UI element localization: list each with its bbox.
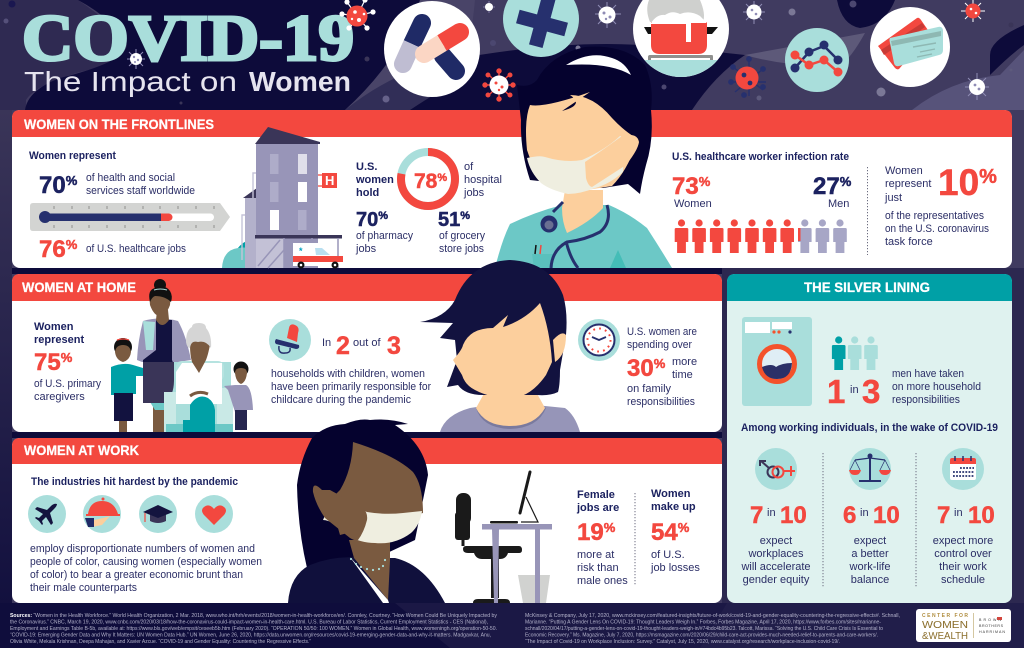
stat: men infection rate: 27 — [813, 173, 840, 200]
stat: 30 percent: on family — [627, 383, 672, 395]
stat: 2 out of 3: 2 — [336, 332, 350, 360]
stat: 54 percent: % — [678, 520, 690, 535]
logo: center for women and wealth: &WEALTH — [922, 630, 968, 642]
stat: 19 percent: jobs are — [576, 502, 619, 514]
stat: 2 out of 3 — [322, 332, 401, 360]
stat: 19 percent — [576, 489, 628, 587]
stat: grocery jobs — [438, 209, 485, 255]
text block: disproportionate: of color) to bear a greater economic brunt than — [30, 569, 243, 581]
sources: right column: “The Impact of Covid-19 on Workplace Inclusion: Survey.” Catalyst, July 15, 2020, www.catalyst.org/research/workplace-inclusion-covid-19/. — [525, 639, 840, 645]
stat: 30 percent: more — [672, 356, 697, 368]
icon: virus white right top — [743, 1, 765, 24]
logo: center for women and wealth — [916, 609, 1011, 642]
icon: graduation cap — [139, 495, 177, 533]
stat: 54 percent: make up — [651, 501, 696, 513]
icon: line chart circle — [785, 28, 849, 92]
text block: caregivers: Women — [34, 321, 74, 333]
icon: heart — [195, 495, 233, 533]
stat: gender equity: in — [767, 507, 776, 519]
text block: U.S. women hold: hold — [356, 187, 379, 199]
stat: 19 percent: % — [604, 520, 616, 535]
text block: women represent: Women represent — [29, 150, 116, 162]
text block: U.S. women hold: women — [355, 174, 394, 186]
icon: virus red centre — [483, 69, 515, 101]
sources: left column: Employment and Earnings Table B-5b, available at: https://www.bls.gov/web/empsit/ceseeb5b.htm (February 2020). “OPERATION 50/50: 100 WOMEN.” Women in Global Health, www.womeningh.org/operation-50-50. — [10, 626, 497, 632]
stat: 30 percent: time — [672, 369, 693, 381]
stat: 30 percent: % — [654, 356, 666, 371]
stat: gender equity: 10 — [780, 502, 807, 529]
stat: pharmacy jobs: % — [378, 210, 388, 222]
stat: 54 percent — [650, 488, 700, 574]
stat: grocery jobs: store jobs — [439, 243, 484, 255]
text block: households: households with children, women — [271, 368, 425, 380]
stat: 19 percent: male ones — [577, 575, 628, 587]
text block: disproportionate: employ disproportionate numbers of women and — [30, 543, 255, 555]
logo: center for women and wealth: WOMEN — [922, 619, 968, 631]
subheading: Among working individuals, in the wake of COVID-19 — [741, 422, 998, 434]
stat: 30 percent: U.S. women are — [627, 326, 697, 338]
text block: women represent: services staff worldwide — [86, 185, 195, 197]
stat: work-life balance: work-life — [849, 561, 890, 573]
stat: 1 in 3: responsibilities — [892, 394, 960, 406]
stat: 1 in 3: in — [850, 384, 859, 396]
stat: men infection rate: % — [840, 174, 852, 189]
heading: WOMEN AT HOME — [22, 279, 136, 295]
stat: 76 percent: % — [66, 237, 78, 252]
stat: work schedule: control over — [934, 548, 992, 560]
thermometer chart — [30, 203, 230, 231]
text block: infection rate heading: U.S. healthcare worker infection rate — [672, 151, 849, 163]
stat: work-life balance: 6 — [843, 502, 856, 529]
stat: 19 percent: risk than — [577, 562, 619, 574]
stat: work schedule: expect more — [933, 535, 993, 547]
sources: left column: Sources: “Women in the Health Workforce.” World Health Organization, 2 Mar. 2018, www.who.int/hrh/events/2018/women-in-health-workforce/en/. Connley, Courtney. “How Women Could Be Uniquely Impacted by — [10, 613, 497, 619]
stat: task force: % — [979, 166, 997, 188]
stat: 19 percent: more at — [577, 549, 614, 561]
logo: center for women and wealth: CENTER FOR — [922, 613, 968, 619]
icon: washing machine — [742, 317, 812, 406]
stat: 2 out of 3: 3 — [387, 332, 401, 360]
icon: virus red top right — [961, 0, 985, 22]
panel: women on the frontlines — [12, 110, 1012, 268]
text block: households: childcare during the pandemic — [271, 394, 411, 406]
icon: virus white small top — [483, 1, 495, 13]
stat: work schedule: their work — [939, 561, 987, 573]
stat: women infection rate: % — [699, 174, 711, 189]
stat: 2 out of 3: out of — [353, 337, 381, 349]
panel: women at work — [12, 438, 722, 603]
stat: women infection rate: Women — [674, 198, 712, 210]
stat: work schedule: in — [954, 507, 963, 519]
stat: task force: task force — [885, 236, 933, 248]
text block: U.S. women hold: U.S. — [356, 161, 377, 173]
illustration: hospital: H — [325, 173, 334, 188]
stat: 1 in 3: 1 — [827, 373, 845, 410]
stat: pharmacy jobs: 70 — [356, 209, 378, 231]
text block: of hospital jobs: jobs — [463, 187, 485, 199]
donut chart: 78 percent: % — [437, 172, 447, 184]
stat: work schedule — [933, 502, 995, 586]
stat: 1 in 3 — [827, 368, 981, 410]
stat: 76 percent — [39, 236, 186, 263]
text block: women represent — [29, 150, 195, 199]
stat: task force — [884, 162, 997, 248]
stat: 2 out of 3: In — [322, 337, 331, 349]
stat: 76 percent: of U.S. healthcare jobs — [86, 243, 186, 255]
icon: gender symbols — [755, 448, 797, 490]
pictogram: ten people — [675, 219, 847, 253]
text block: of hospital jobs — [463, 161, 502, 199]
panel: the silver lining — [727, 274, 1012, 603]
stat: 30 percent: responsibilities — [627, 396, 695, 408]
stat: task force: Women — [885, 165, 923, 177]
title: COVID-19 — [22, 2, 354, 75]
sources: right column: schnall/2020/04/17/putting-a-gender-lens-on-covid-19-thought-leaders-weigh-in/#74bdc4b95b23. Talcott, Marissa. “Solving the U.S. Child Care Crisis Is Essential to — [525, 626, 883, 632]
stat: grocery jobs: of grocery — [439, 230, 485, 242]
sources: left column: the Coronavirus.” CNBC, March 19, 2020, www.cnbc.com/2020/03/18/how-the-coronavirus-could-impact-women-in-health-care.html. U.S. Bureau of Labor Statistics, Current Employment Statistics - CES (National), — [10, 620, 488, 626]
sources: right column — [525, 613, 900, 645]
icon: credit cards circle — [870, 7, 950, 87]
text block: households — [271, 368, 431, 406]
illustration: woman at home — [420, 260, 580, 432]
stat: work-life balance: expect — [854, 535, 886, 547]
donut chart: 78 percent — [401, 152, 455, 206]
subtitle: Women — [249, 66, 351, 97]
icon: airplane — [28, 495, 66, 533]
stat: gender equity: gender equity — [743, 574, 810, 586]
text block: disproportionate: people of color, causing women (especially women — [30, 556, 262, 568]
text block: caregivers: % — [61, 350, 73, 365]
text block: of hospital jobs: hospital — [464, 174, 502, 186]
text block: households: have been primarily responsible for — [271, 381, 431, 393]
sources: right column: McKinsey & Company, July 17, 2020, www.mckinsey.com/featured-insights/future-of-work/covid-19-and-gender-equality-countering-the-regressive-effects#. Schnall, — [525, 613, 900, 619]
text block: disproportionate — [30, 543, 262, 594]
stat: gender equity — [740, 502, 811, 586]
icon: pills circle — [384, 1, 480, 97]
text block: women represent: 70 — [39, 172, 66, 199]
icon: calendar — [942, 448, 984, 490]
icon: boiling pot circle — [633, 0, 729, 77]
stat: task force: of the representatives — [885, 210, 984, 222]
stat: 54 percent: of U.S. — [651, 549, 685, 561]
stat: work schedule: 10 — [968, 502, 995, 529]
sources: left column: Olivia White, Mekala Krishnan, Deepa Mahajan, and Xavier Azcue. “COVID-19 and Gender Equality: Countering the Regressive Effects.” — [10, 639, 311, 645]
sources: left column: “COVID-19: Emerging Gender Data and Why It Matters: UN Women Data Hub.” UN Women, June 26, 2020, https://data.unwomen.org/resources/covid-19-emerging-gender-data-and-why-it-matters. Madgavkar, Anu, — [10, 632, 491, 638]
stat: men infection rate — [813, 173, 852, 210]
stat: gender equity: will accelerate — [740, 561, 811, 573]
subtitle — [24, 66, 351, 97]
stat: task force: 10 — [938, 162, 979, 203]
subtitle: The Impact on — [24, 66, 237, 97]
text block: caregivers: 75 — [34, 349, 61, 376]
stat: work-life balance: balance — [851, 574, 889, 586]
stat: pharmacy jobs — [355, 209, 413, 255]
stat: work schedule: schedule — [941, 574, 985, 586]
illustration: nurse — [495, 47, 672, 268]
text block: women represent: % — [66, 173, 78, 188]
stat: 1 in 3: men have taken — [892, 368, 964, 380]
text block: caregivers: represent — [34, 334, 84, 346]
logo: center for women and wealth: BROWN — [979, 618, 1001, 622]
icon: virus white centre top — [595, 2, 621, 28]
illustration: family — [111, 279, 253, 432]
stat: women infection rate — [672, 173, 712, 210]
stat: work-life balance: in — [860, 507, 869, 519]
icon: medical cross circle — [503, 0, 579, 57]
illustration: desk and chair — [455, 472, 552, 603]
icon: virus navy and red — [729, 57, 766, 97]
stat: task force: on the U.S. coronavirus — [885, 223, 989, 235]
stat: gender equity: expect — [760, 535, 792, 547]
text block: caregivers: caregivers — [34, 391, 85, 403]
panel: women at home — [12, 274, 722, 432]
icon: virus white bottom right — [965, 73, 989, 100]
stat: grocery jobs: 51 — [438, 209, 460, 231]
icon: pacifier — [269, 319, 311, 361]
icon: restaurant service — [83, 495, 121, 533]
stat: women infection rate: 73 — [672, 173, 699, 200]
icon: virus white left — [127, 49, 145, 69]
stat: men infection rate: Men — [828, 198, 849, 210]
text block: disproportionate: their male counterparts — [30, 582, 137, 594]
stat: pharmacy jobs: jobs — [355, 243, 377, 255]
stat: task force: represent — [885, 178, 931, 190]
heading: WOMEN ON THE FRONTLINES — [24, 116, 214, 132]
illustration: hospital — [222, 127, 343, 268]
illustration: hospital: * — [299, 246, 303, 256]
stat: task force: just — [884, 192, 902, 204]
text block: U.S. women hold — [355, 161, 394, 199]
logo: center for women and wealth: HARRIMAN — [979, 630, 1005, 634]
subheading: The industries hit hardest by the pandemic — [31, 476, 238, 488]
stat: grocery jobs: % — [460, 210, 470, 222]
stat: 54 percent: Women — [651, 488, 691, 500]
stat: 30 percent: 30 — [627, 355, 654, 382]
pictogram: 1 in 3 men — [832, 336, 878, 370]
stat: 30 percent — [627, 326, 697, 408]
heading: WOMEN AT WORK — [24, 442, 139, 458]
stat: work-life balance: a better — [851, 548, 889, 560]
sources: right column: Marianne. “Putting A Gender Lens On COVID-19: Thought Leaders Weigh In.” Forbes, Forbes Magazine, April 17, 2020, https://www.forbes.com/sites/marianne- — [525, 620, 881, 626]
stat: 1 in 3: 3 — [862, 373, 880, 410]
sources: left column — [10, 613, 497, 645]
stat: work-life balance: 10 — [873, 502, 900, 529]
stat: 54 percent: job losses — [650, 562, 700, 574]
text block: women represent: of health and social — [86, 172, 175, 184]
text block: caregivers: of U.S. primary — [34, 378, 101, 390]
stat: 19 percent: Female — [577, 489, 615, 501]
stat: 30 percent: spending over — [627, 339, 692, 351]
heading: THE SILVER LINING — [804, 279, 930, 295]
logo: center for women and wealth: BROTHERS — [979, 624, 1004, 628]
stat: work schedule: 7 — [937, 502, 950, 529]
text block: caregivers — [34, 321, 101, 403]
stat: 76 percent: 76 — [39, 236, 66, 263]
illustration: woman at work — [288, 420, 445, 603]
sources: right column: Economic Recovery.” Ms. Magazine, July 7, 2020, https://msmagazine.com/2020/06/29/child-care-act-provides-much-needed-relief-to-parents-and-care-workers/. — [525, 632, 878, 638]
stat: gender equity: 7 — [750, 502, 763, 529]
donut chart: 78 percent: 78 — [414, 170, 437, 193]
stat: 54 percent: 54 — [651, 519, 678, 546]
icon: clock — [578, 319, 620, 361]
stat: 1 in 3: on more household — [892, 381, 981, 393]
stat: gender equity: workplaces — [747, 548, 804, 560]
stat: pharmacy jobs: of pharmacy — [356, 230, 413, 242]
stat: work-life balance — [843, 502, 900, 586]
stat: 19 percent: 19 — [577, 519, 604, 546]
text block: of hospital jobs: of — [464, 161, 474, 173]
icon: virus red title — [340, 0, 375, 30]
icon: balance scales — [849, 448, 891, 490]
